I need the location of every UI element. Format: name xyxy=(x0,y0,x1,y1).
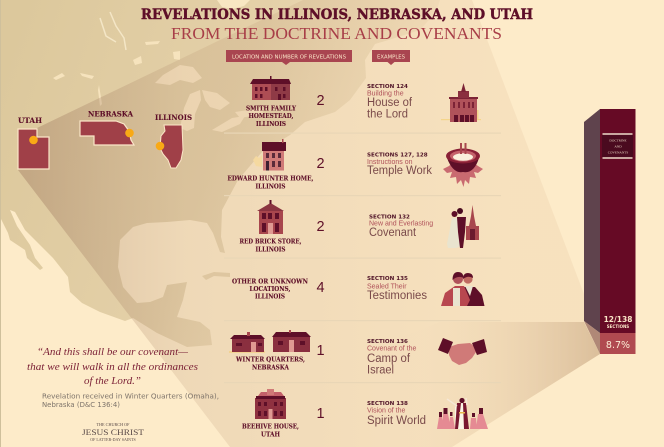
row 1: Smith Family Homestead: 2 xyxy=(316,93,325,109)
row 6: Beehive House xyxy=(242,389,325,438)
book: Doctrine and Covenants xyxy=(584,109,636,354)
quote: “And this shall be our covenant— xyxy=(37,347,188,358)
book label plate: COVENANTS xyxy=(608,150,628,154)
icon: couple and temple xyxy=(447,205,479,248)
row 4: other or unknown locations xyxy=(232,278,325,300)
row 4 example: section 135: Sealed Their xyxy=(367,284,407,290)
icon: Christ among spirits xyxy=(437,398,488,429)
row 1: Smith Family Homestead: HOMESTEAD, xyxy=(248,113,294,120)
icon: Beehive House xyxy=(255,389,286,419)
icon: log cabins xyxy=(229,330,311,352)
row 6: Beehive House: BEEHIVE HOUSE, xyxy=(242,424,299,430)
row 1: Smith Family Homestead: SMITH FAMILY xyxy=(246,106,296,112)
quote: that we will walk in all the ordinances xyxy=(27,362,198,373)
icon: Smith home xyxy=(250,76,291,100)
row 6: Beehive House: UTAH xyxy=(261,432,280,438)
row 2: Edward Hunter Home: 2 xyxy=(316,156,325,172)
row 3: Red Brick Store: ILLINOIS xyxy=(256,246,286,254)
row 2: Edward Hunter Home: ILLINOIS xyxy=(256,184,286,190)
row 1 example: section 124: House of xyxy=(367,97,413,109)
church logo: OF LATTER-DAY SAINTS xyxy=(90,437,136,442)
icon: Nauvoo temple xyxy=(441,83,481,122)
stat: 12 of 138 sections: 12/138 xyxy=(604,315,632,324)
tag: location and number of revelations xyxy=(226,50,352,65)
row 5: Winter Quarters: 1 xyxy=(316,343,325,359)
row 5 example: section 136: Camp of xyxy=(367,353,411,365)
icon: Edward Hunter home xyxy=(253,139,286,170)
quote attribution: Nebraska (D&C 136:4) xyxy=(42,401,120,409)
row 3: Red Brick Store xyxy=(240,200,325,254)
church logo: THE CHURCH OF xyxy=(96,422,130,427)
row 6 example: section 138 xyxy=(367,398,488,429)
tag: location and number of revelations: LOCATION AND NUMBER OF REVELATIONS xyxy=(232,54,346,60)
row 5 example: section 136 xyxy=(367,338,487,376)
page edge xyxy=(0,0,1,447)
row 5 example: section 136: Israel xyxy=(367,364,394,376)
row 3 example: section 132 xyxy=(369,205,479,248)
row 4 example: section 135 xyxy=(367,272,484,306)
book side xyxy=(584,109,600,333)
stat: 12 of 138 sections xyxy=(604,315,632,329)
row 4: other or unknown locations: 4 xyxy=(316,280,325,296)
map of North America xyxy=(0,0,440,347)
light beam from book xyxy=(398,322,600,447)
icon: baptismal font xyxy=(443,143,483,187)
row 5 example: section 136: Covenant of the xyxy=(367,346,417,352)
row 1: Smith Family Homestead xyxy=(246,76,325,128)
row 1 example: section 124 xyxy=(367,83,481,122)
row 5: Winter Quarters: NEBRASKA xyxy=(252,364,289,372)
state: Illinois xyxy=(155,113,192,168)
state: Nebraska xyxy=(80,110,134,145)
row 6: Beehive House: 1 xyxy=(316,406,325,422)
stat: 8.7 percent xyxy=(600,333,636,354)
book label plate: AND xyxy=(614,144,622,148)
row 1 example: section 124: SECTION 124 xyxy=(367,84,408,90)
row 5: Winter Quarters: WINTER QUARTERS, xyxy=(235,356,305,364)
tag: examples xyxy=(372,50,410,65)
row 2 example: sections 127, 128: Temple Work xyxy=(367,165,432,177)
row 1 example: section 124: the Lord xyxy=(367,108,408,120)
row 4 example: section 135: SECTION 135 xyxy=(367,276,408,282)
quote attribution: Revelation received in Winter Quarters (Omaha), xyxy=(42,392,219,400)
row 4 example: section 135: Testimonies xyxy=(367,290,427,302)
icon: handshake xyxy=(438,338,487,365)
state: Illinois: ILLINOIS xyxy=(155,113,192,122)
church logo xyxy=(82,422,145,442)
row 6 example: section 138: Vision of the xyxy=(367,408,406,414)
icon: red brick store xyxy=(257,200,284,234)
state: Utah xyxy=(18,116,49,169)
tag: examples: EXAMPLES xyxy=(377,54,405,60)
row 5 example: section 136: SECTION 136 xyxy=(367,339,408,345)
row 3: Red Brick Store: 2 xyxy=(316,219,325,235)
state: Utah: UTAH xyxy=(18,116,42,125)
row 2 example: sections 127, 128 xyxy=(367,143,483,187)
row 2: Edward Hunter Home: EDWARD HUNTER HOME, xyxy=(228,176,314,182)
title: REVELATIONS IN ILLINOIS, NEBRASKA, AND UTAH xyxy=(141,7,533,23)
state: Nebraska: NEBRASKA xyxy=(88,110,133,118)
row 4: other or unknown locations: ILLINOIS xyxy=(255,294,285,300)
row 2 example: sections 127, 128: Instructions on xyxy=(367,159,413,166)
row 1 example: section 124: Building the xyxy=(367,90,404,98)
row dividers xyxy=(224,132,501,383)
row 6 example: section 138: SECTION 138 xyxy=(367,401,408,407)
row 3 example: section 132: New and Everlasting xyxy=(369,220,433,228)
book label plate: DOCTRINE xyxy=(609,138,627,142)
row 6 example: section 138: Spirit World xyxy=(367,415,426,427)
icon: Joseph and Hyrum xyxy=(441,272,484,306)
row 2: Edward Hunter Home xyxy=(228,139,325,190)
row 3 example: section 132: Covenant xyxy=(369,227,417,239)
quote xyxy=(27,347,198,387)
book spine xyxy=(600,109,636,333)
row 4: other or unknown locations: OTHER OR UNKNOWN xyxy=(232,278,308,286)
subtitle: FROM THE DOCTRINE AND COVENANTS xyxy=(171,24,502,43)
book label plate xyxy=(602,133,633,159)
stat: 12 of 138 sections: SECTIONS xyxy=(607,324,629,329)
quote attribution xyxy=(42,392,219,409)
row 3: Red Brick Store: RED BRICK STORE, xyxy=(240,238,302,246)
row 5: Winter Quarters xyxy=(229,330,325,372)
row 3 example: section 132: SECTION 132 xyxy=(369,214,410,220)
church logo: JESUS CHRIST xyxy=(82,427,145,437)
row 2 example: sections 127, 128: SECTIONS 127, 128 xyxy=(367,152,428,158)
quote: of the Lord.” xyxy=(84,376,141,387)
row 4: other or unknown locations: LOCATIONS, xyxy=(250,286,290,293)
row 1: Smith Family Homestead: ILLINOIS xyxy=(256,121,286,128)
stat: 8.7 percent: 8.7% xyxy=(606,340,630,351)
